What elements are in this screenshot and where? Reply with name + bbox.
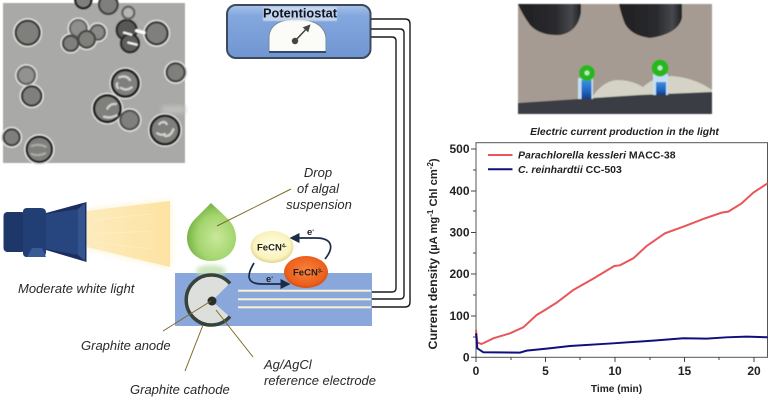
FeCN3- ellipse — [284, 256, 328, 288]
light beam — [87, 201, 170, 267]
drop of algal suspension — [187, 203, 236, 261]
label: graphite anode: Graphite anode — [81, 338, 171, 353]
y axis title: -1 — [426, 209, 435, 217]
y axis labels: 200 — [449, 267, 470, 281]
y axis title: ) — [428, 158, 440, 162]
label: graphite cathode: Graphite cathode — [130, 382, 230, 397]
label: drop of algal suspension — [286, 165, 352, 212]
label: reference electrode: reference electrode — [264, 373, 376, 388]
label: moderate white light: Moderate white light — [18, 281, 136, 296]
y axis labels: 400 — [449, 184, 470, 198]
legend: C. reinhardtii CC-503 — [518, 164, 622, 176]
x axis labels — [473, 364, 761, 378]
x axis labels: 10 — [608, 364, 622, 378]
y axis title: -2 — [426, 162, 435, 169]
icon: lamp — [4, 202, 86, 262]
x axis labels: 0 — [473, 364, 480, 378]
FeCN cycle arrows — [249, 238, 331, 284]
axis ticks — [471, 149, 754, 362]
electron labels: - — [271, 275, 273, 281]
y axis title: Chl cm — [428, 169, 440, 210]
photo of electrodes — [518, 4, 712, 114]
series: Parachlorella kessleri — [476, 183, 768, 344]
x axis labels: 5 — [542, 364, 549, 378]
green glow — [196, 265, 226, 277]
label: drop of algal suspension: suspension — [286, 197, 352, 212]
electron labels: e — [266, 274, 271, 285]
y axis labels: 100 — [449, 309, 470, 323]
x axis title: Time (min) — [591, 384, 642, 395]
label: drop of algal suspension: of algal — [297, 181, 340, 196]
y axis title: Current density (µA mg — [426, 217, 440, 350]
y axis labels: 300 — [449, 226, 470, 240]
wires — [371, 19, 410, 307]
FeCN3- ellipse: 3- — [318, 268, 323, 274]
electron labels: - — [312, 228, 314, 234]
label: reference electrode — [263, 357, 376, 388]
label: drop of algal suspension: Drop — [304, 165, 332, 180]
x axis labels: 20 — [747, 364, 761, 378]
FeCN4- ellipse: FeCN — [257, 242, 282, 254]
line chart: current density vs time — [426, 142, 768, 395]
x axis labels: 15 — [678, 364, 691, 378]
legend: Parachlorella kessleri MACC-38 — [518, 150, 676, 162]
potentiostat — [227, 5, 410, 307]
micrograph of algal cells — [2, 0, 186, 163]
electron labels: e — [307, 227, 312, 238]
FeCN3- ellipse: FeCN — [293, 268, 318, 278]
plot frame — [476, 143, 768, 357]
leader lines — [163, 189, 291, 371]
potentiostat: Potentiostat — [263, 6, 338, 20]
FeCN4- ellipse: 4- — [282, 244, 287, 250]
FeCN4- ellipse — [250, 231, 294, 263]
chart title: Electric current production in the light — [530, 127, 719, 138]
electrodes — [186, 275, 230, 325]
y axis labels — [449, 142, 470, 364]
cell substrate — [175, 273, 372, 326]
y axis labels: 500 — [449, 142, 470, 156]
electron labels — [266, 227, 314, 285]
label: reference electrode: Ag/AgCl — [263, 357, 313, 372]
y axis labels: 0 — [463, 350, 470, 364]
legend — [488, 150, 676, 176]
series: C. reinhardtii — [476, 333, 768, 353]
